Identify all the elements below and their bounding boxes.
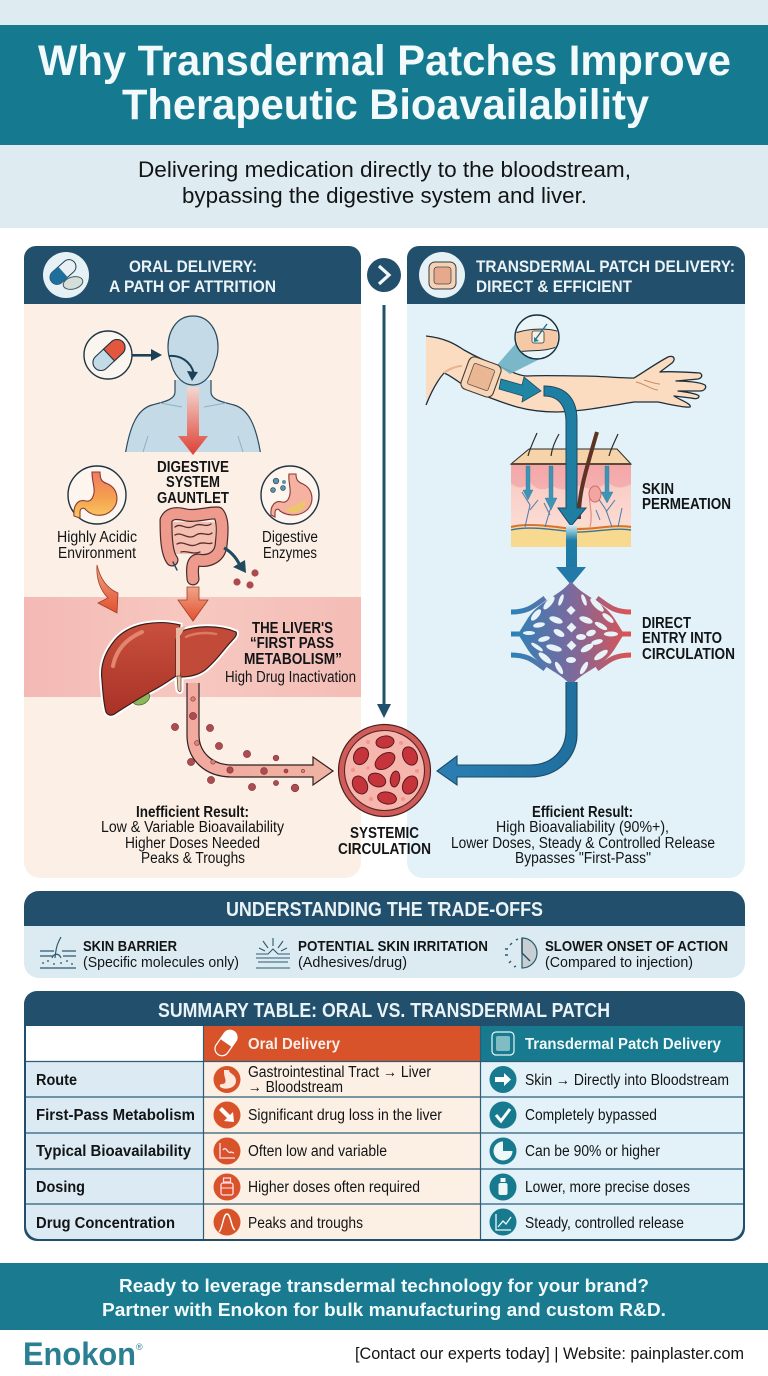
transdermal header [407, 246, 745, 304]
heading: trade-offs: UNDERSTANDING THE TRADE-OFFS [226, 899, 543, 921]
row: drug concentration: Steady, controlled release [525, 1215, 684, 1232]
label: digestive enzymes: Digestive [262, 529, 318, 546]
arrow: liver to circulation [171, 683, 333, 792]
label: highly acidic environment: Environment [58, 545, 137, 562]
arrow: patch to flow [499, 377, 541, 402]
trade-off: skin barrier: SKIN BARRIER [83, 938, 177, 955]
row: first-pass metabolism: Significant drug loss in the liver [248, 1107, 442, 1124]
trade-off: skin irritation: (Adhesives/drug) [298, 954, 407, 971]
row: dosing: Higher doses often required [248, 1179, 420, 1196]
row: dosing: Lower, more precise doses [525, 1179, 690, 1196]
icon: pie [490, 1138, 516, 1164]
text: efficient result: Efficient Result: [532, 804, 633, 821]
icon: acidic stomach [68, 466, 126, 524]
band: liver zone [24, 597, 361, 697]
row: dosing: Dosing [36, 1179, 85, 1196]
label: skin permeation [642, 481, 731, 513]
call to action banner: Partner with Enokon for bulk manufacturing and custom R&D. [102, 1299, 666, 1320]
arrow: acid to liver [97, 565, 118, 613]
label: digestive gauntlet: DIGESTIVE [157, 459, 229, 476]
label: direct entry: ENTRY INTO [642, 630, 722, 647]
panel: trade-offs [24, 891, 745, 978]
column header: oral [204, 1026, 480, 1061]
table body columns [26, 1062, 203, 1239]
text: inefficient result: Peaks & Troughs [141, 850, 245, 867]
text: efficient result: High Bioavaliability (90%+), [496, 819, 669, 836]
icon: capsule [84, 331, 132, 379]
table background [24, 991, 745, 1241]
summary table [24, 991, 745, 1241]
subtitle [138, 157, 631, 208]
label: first pass metabolism: “FIRST PASS [250, 635, 334, 652]
icon: digestive enzymes [261, 466, 319, 524]
column header: blank [26, 1026, 203, 1061]
logo: Enokon: Enokon [23, 1336, 136, 1372]
label: highly acidic environment [57, 529, 137, 562]
oral header: ORAL DELIVERY: [129, 257, 257, 276]
text: efficient result [451, 804, 715, 867]
label: digestive gauntlet: SYSTEM [166, 474, 220, 491]
transdermal header: DIRECT & EFFICIENT [476, 277, 633, 296]
icon: skin irritation [256, 938, 290, 968]
capillary network [511, 581, 631, 686]
icon: vial [490, 1174, 516, 1200]
skin cross-section [511, 432, 631, 547]
label: direct entry: DIRECT [642, 615, 691, 632]
arrow: network to circulation [437, 682, 577, 785]
panel: oral delivery [24, 246, 361, 878]
trade-off: skin barrier [83, 938, 239, 971]
text: inefficient result: Low & Variable Bioavailability [101, 819, 284, 836]
icon: stomach [214, 1066, 240, 1093]
row: typical bioavailability: Typical Bioavailability [36, 1143, 191, 1160]
row: typical bioavailability: Often low and variable [248, 1143, 387, 1160]
row: first-pass metabolism: First-Pass Metabolism [36, 1107, 195, 1124]
row: first-pass metabolism [36, 1102, 657, 1128]
label: skin permeation: SKIN [642, 481, 674, 498]
icon: pill bottle [214, 1174, 240, 1200]
transdermal header: TRANSDERMAL PATCH DELIVERY: [476, 257, 735, 276]
panel: transdermal delivery [407, 246, 745, 878]
row: drug concentration: Drug Concentration [36, 1215, 175, 1232]
trade-off: skin irritation [298, 938, 488, 971]
trade-off: skin irritation: POTENTIAL SKIN IRRITATION [298, 938, 488, 955]
arrow: down to gut [178, 387, 208, 455]
text: inefficient result: Higher Doses Needed [125, 835, 260, 852]
label: systemic circulation: SYSTEMIC [350, 825, 419, 842]
icon: rising chart [490, 1208, 516, 1236]
label: digestive enzymes: Enzymes [263, 545, 317, 562]
call to action banner [0, 1263, 768, 1330]
call to action banner: Ready to leverage transdermal technology for your brand? [119, 1275, 649, 1296]
trade-off: slower onset: SLOWER ONSET OF ACTION [545, 938, 728, 955]
icon: check [490, 1102, 516, 1128]
heading: summary table: SUMMARY TABLE: ORAL VS. TRANSDERMAL PATCH [158, 1000, 610, 1022]
arrow: vertical permeation flow [544, 386, 586, 585]
text: efficient result: Bypasses "First-Pass" [515, 850, 651, 867]
label: digestive enzymes [262, 529, 318, 562]
text: inefficient result: Inefficient Result: [136, 804, 249, 821]
label: first pass metabolism: THE LIVER'S [252, 620, 333, 637]
column header: patch: Transdermal Patch Delivery [525, 1036, 721, 1053]
text: inefficient result [101, 804, 284, 867]
title banner: Why Transdermal Patches Improve [38, 37, 731, 85]
label: highly acidic environment: Highly Acidic [57, 529, 137, 546]
title banner [0, 0, 768, 228]
icon: hair follicle barrier [40, 937, 76, 968]
row dividers [26, 1062, 743, 1204]
label: systemic circulation [338, 825, 431, 858]
icon: peak curve [214, 1208, 240, 1236]
row: route: Skin → Directly into Bloodstream [525, 1072, 729, 1089]
label: direct entry: CIRCULATION [642, 646, 735, 663]
row: route: Route [36, 1072, 77, 1089]
row: drug concentration [36, 1208, 684, 1236]
title banner: Therapeutic Bioavailability [122, 81, 649, 129]
icon: down arrow [214, 1102, 240, 1128]
label: systemic circulation: CIRCULATION [338, 841, 431, 858]
arrow: to mouth [132, 349, 162, 361]
logo: Enokon: ® [136, 1342, 143, 1352]
row: dosing [36, 1174, 690, 1200]
label: first pass metabolism: High Drug Inactivation [225, 669, 356, 686]
column header: oral: Oral Delivery [248, 1036, 340, 1053]
contact line: [Contact our experts today] | Website: painplaster.com [355, 1345, 744, 1363]
liver [102, 623, 236, 715]
icon: low chart [214, 1138, 240, 1164]
arrow: gut to liver [178, 587, 208, 621]
label: first pass metabolism [225, 620, 356, 686]
trade-off: slower onset [545, 938, 728, 971]
row: route [36, 1064, 729, 1096]
column header: patch [481, 1026, 743, 1061]
label: digestive gauntlet [157, 459, 229, 507]
row: route: Gastrointestinal Tract → Liver [248, 1064, 431, 1081]
trade-off: skin barrier: (Specific molecules only) [83, 954, 239, 971]
subtitle: Delivering medication directly to the bloodstream, [138, 157, 631, 182]
row: drug concentration: Peaks and troughs [248, 1215, 363, 1232]
icon: right arrow [490, 1066, 516, 1093]
human figure [125, 316, 261, 456]
label: direct entry [642, 615, 735, 663]
label: first pass metabolism: METABOLISM” [244, 651, 342, 668]
label: digestive gauntlet: GAUNTLET [157, 490, 229, 507]
label: skin permeation: PERMEATION [642, 496, 731, 513]
arrow: drug loss dots [224, 548, 259, 589]
arm with patch [426, 336, 706, 412]
oral header: A PATH OF ATTRITION [109, 277, 276, 296]
trade-off: slower onset: (Compared to injection) [545, 954, 693, 971]
arrow: central comparison [367, 258, 401, 718]
row: typical bioavailability [36, 1138, 660, 1164]
row: typical bioavailability: Can be 90% or higher [525, 1143, 660, 1160]
text: efficient result: Lower Doses, Steady & Controlled Release [451, 835, 715, 852]
row: route: → Bloodstream [248, 1079, 343, 1096]
column dividers [204, 1026, 480, 1239]
row: first-pass metabolism: Completely bypassed [525, 1107, 657, 1124]
skin patch with magnifier [459, 315, 560, 399]
oral header [24, 246, 361, 304]
intestine [166, 513, 222, 579]
systemic circulation [338, 724, 430, 816]
subtitle: bypassing the digestive system and liver. [182, 183, 587, 208]
icon: clock [505, 938, 537, 968]
